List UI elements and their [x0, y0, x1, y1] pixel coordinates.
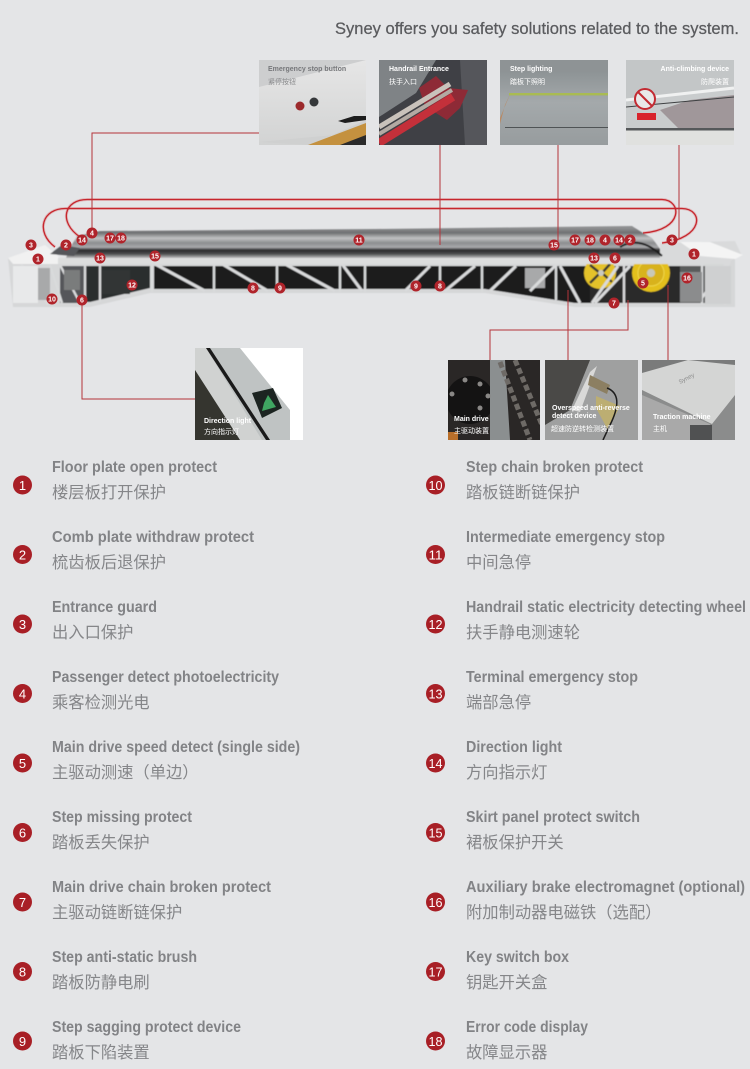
diagram number badges: 4 [603, 238, 607, 244]
item 7: 7 [19, 895, 26, 910]
connector: step lighting [557, 145, 559, 242]
diagram number badges: 7 [612, 300, 616, 308]
heading: Syney offers you safety solutions related to the system. [335, 19, 739, 38]
photo: overspeed device: 超速防逆转检测装置 [551, 424, 614, 433]
item 8: 8 [19, 964, 26, 980]
item 6: 踏板丢失保护 [52, 834, 150, 852]
photo: traction machine: Traction machine [653, 414, 711, 421]
deck [8, 245, 60, 264]
diagram number badges: 3 [29, 242, 33, 250]
photo: anti-climbing device: 防爬装置 [701, 77, 729, 86]
vertical post [623, 264, 625, 305]
photo: traction machine: 主机 [653, 424, 667, 433]
item 18: Error code display [466, 1019, 588, 1036]
truss dark interior [60, 266, 705, 303]
item 6: Step missing protect [52, 809, 193, 826]
legend left column [13, 459, 300, 1062]
photo: handrail entrance: Handrail Entrance [389, 66, 449, 73]
connector: direction light [82, 298, 212, 399]
item 16 [426, 879, 745, 922]
diagram number badges: 11 [355, 238, 363, 244]
item 9: 9 [19, 1034, 26, 1049]
diagram number badges: 8 [251, 286, 255, 292]
item 15 [426, 809, 640, 852]
item 3: Entrance guard [52, 599, 157, 616]
diagram number badges: 8 [438, 284, 442, 290]
item 4: 乘客检测光电 [52, 694, 150, 712]
diagram number badges: 14 [615, 238, 623, 244]
left machine room [13, 266, 130, 303]
photo: emergency stop button [259, 60, 366, 145]
item 8: 踏板防静电刷 [52, 974, 150, 992]
item 5 [13, 739, 300, 782]
diagram number badges: 18 [586, 238, 594, 244]
diagram number badges: 12 [128, 282, 136, 290]
item 14: 方向指示灯 [466, 764, 547, 782]
connector: handrail entrance [439, 145, 441, 245]
photo: main drive: Main drive [454, 416, 489, 423]
photo: overspeed device [545, 360, 638, 440]
item 1 [13, 459, 218, 502]
item 6: 6 [19, 826, 26, 840]
photo: overspeed device: Overspeed anti-reverse [552, 405, 630, 412]
item 14 [426, 739, 563, 782]
diagram number badges: 15 [151, 254, 159, 260]
item 2: 2 [19, 548, 26, 562]
item 1: Floor plate open protect [52, 459, 218, 476]
photo: emergency stop button: Emergency stop button [268, 66, 346, 73]
item 3: 3 [19, 617, 26, 632]
diagram number badges: 17 [106, 236, 114, 242]
item 4: 4 [19, 686, 26, 702]
diagram number badges: 18 [117, 236, 125, 242]
right machine room [680, 266, 731, 304]
item 9: 踏板下陷装置 [52, 1044, 150, 1062]
photo: traction machine [642, 360, 735, 440]
item 14: Direction light [466, 739, 563, 756]
legend right column [426, 459, 746, 1062]
item 11: Intermediate emergency stop [466, 529, 665, 546]
photo: anti-climbing device [626, 60, 734, 130]
photo: step lighting [500, 60, 608, 145]
item 5: 5 [19, 756, 26, 771]
item 9: Step sagging protect device [52, 1019, 241, 1036]
item 10: 10 [428, 478, 442, 493]
connector: anti-climbing [678, 145, 680, 238]
connector: overspeed [567, 290, 569, 368]
item 11 [426, 529, 665, 572]
photo: overspeed device: detect device [552, 413, 596, 420]
diagram number badges: 9 [278, 286, 282, 292]
truss frame [8, 258, 735, 307]
connector: traction machine [667, 285, 669, 368]
diagram number badges: 14 [78, 238, 86, 244]
photo: direction light [195, 348, 303, 440]
item 3 [13, 599, 157, 642]
item 13: 13 [428, 686, 442, 702]
diagram number badges: 6 [80, 298, 84, 304]
item 16: 附加制动器电磁铁（选配） [466, 904, 661, 922]
connector: main drive [490, 300, 628, 368]
item 17: 17 [428, 964, 442, 980]
diagram number badges: 13 [590, 256, 598, 262]
item 3: 出入口保护 [52, 624, 133, 642]
photo: main drive [446, 360, 542, 440]
item 10: Step chain broken protect [466, 459, 644, 476]
item 2: Comb plate withdraw protect [52, 529, 255, 546]
photo: direction light: 方向指示灯 [204, 427, 239, 436]
yellow drive wheel large [632, 254, 670, 292]
item 1: 楼层板打开保护 [52, 484, 166, 502]
item 11: 11 [428, 548, 442, 562]
escalator diagram [8, 226, 743, 307]
diagram number badges: 17 [571, 238, 579, 244]
item 4 [13, 669, 279, 712]
photo: handrail entrance: 扶手入口 [389, 77, 417, 86]
item 15: Skirt panel protect switch [466, 809, 640, 826]
diagram number badges [26, 228, 700, 308]
item 10: 踏板链断链保护 [466, 484, 580, 502]
diagram number badges: 9 [414, 284, 418, 290]
item 17: Key switch box [466, 949, 569, 966]
item 18 [426, 1019, 588, 1062]
item 2: 梳齿板后退保护 [52, 554, 166, 572]
item 15: 裙板保护开关 [466, 834, 564, 852]
item 12: 12 [428, 617, 442, 632]
diagram number badges: 3 [670, 238, 674, 244]
photo: handrail entrance [379, 60, 487, 145]
item 5: 主驱动测速（单边） [52, 764, 199, 782]
photo: anti-climbing device: Anti-climbing device [661, 66, 729, 73]
item 1: 1 [19, 478, 26, 493]
item 11: 中间急停 [466, 554, 531, 572]
balustrade [66, 226, 663, 258]
item 9 [13, 1019, 241, 1062]
diagram number badges: 2 [628, 238, 632, 244]
diagram number badges: 16 [683, 276, 691, 282]
item 14: 14 [428, 756, 442, 771]
item 2 [13, 529, 255, 572]
photo: step lighting: 踏板下照明 [510, 77, 545, 86]
item 12: 扶手静电测速轮 [466, 624, 580, 642]
photo: step lighting: Step lighting [510, 66, 552, 73]
truss members [20, 262, 730, 305]
item 15: 15 [428, 826, 442, 840]
item 7: 主驱动链断链保护 [52, 904, 182, 922]
item 13: 端部急停 [466, 694, 531, 712]
item 12 [426, 599, 746, 642]
item 10 [426, 459, 644, 502]
diagram number badges: 1 [36, 256, 40, 264]
item 18: 18 [428, 1034, 442, 1049]
connector: emergency stop [92, 133, 266, 230]
item 17: 钥匙开关盒 [466, 974, 547, 992]
diagram number badges: 4 [90, 230, 94, 238]
diagram number badges: 2 [64, 242, 68, 250]
diagram number badges: 13 [96, 256, 104, 262]
item 13 [426, 669, 638, 712]
item 8: Step anti-static brush [52, 949, 197, 966]
diagram number badges: 5 [641, 280, 645, 288]
item 18: 故障显示器 [466, 1044, 547, 1062]
item 13: Terminal emergency stop [466, 669, 638, 686]
item 6 [13, 809, 193, 852]
photo: main drive: 主驱动装置 [454, 426, 489, 435]
diagram number badges: 1 [692, 252, 696, 258]
photo: direction light: Direction light [204, 418, 252, 425]
item 5: Main drive speed detect (single side) [52, 739, 300, 756]
diagram number badges: 15 [550, 242, 558, 250]
yellow drive wheel small [584, 257, 616, 289]
diagram number badges: 10 [48, 296, 56, 304]
item 7: Main drive chain broken protect [52, 879, 272, 896]
photo: emergency stop button: 紧停按钮 [268, 77, 296, 86]
item 16: 16 [428, 895, 442, 910]
photo: traction machine: Syney [678, 373, 696, 386]
item 17 [426, 949, 569, 992]
red handrail loops [43, 199, 697, 247]
diagram number badges: 6 [613, 256, 617, 262]
item 8 [13, 949, 197, 992]
item 4: Passenger detect photoelectricity [52, 669, 279, 686]
item 7 [13, 879, 272, 922]
